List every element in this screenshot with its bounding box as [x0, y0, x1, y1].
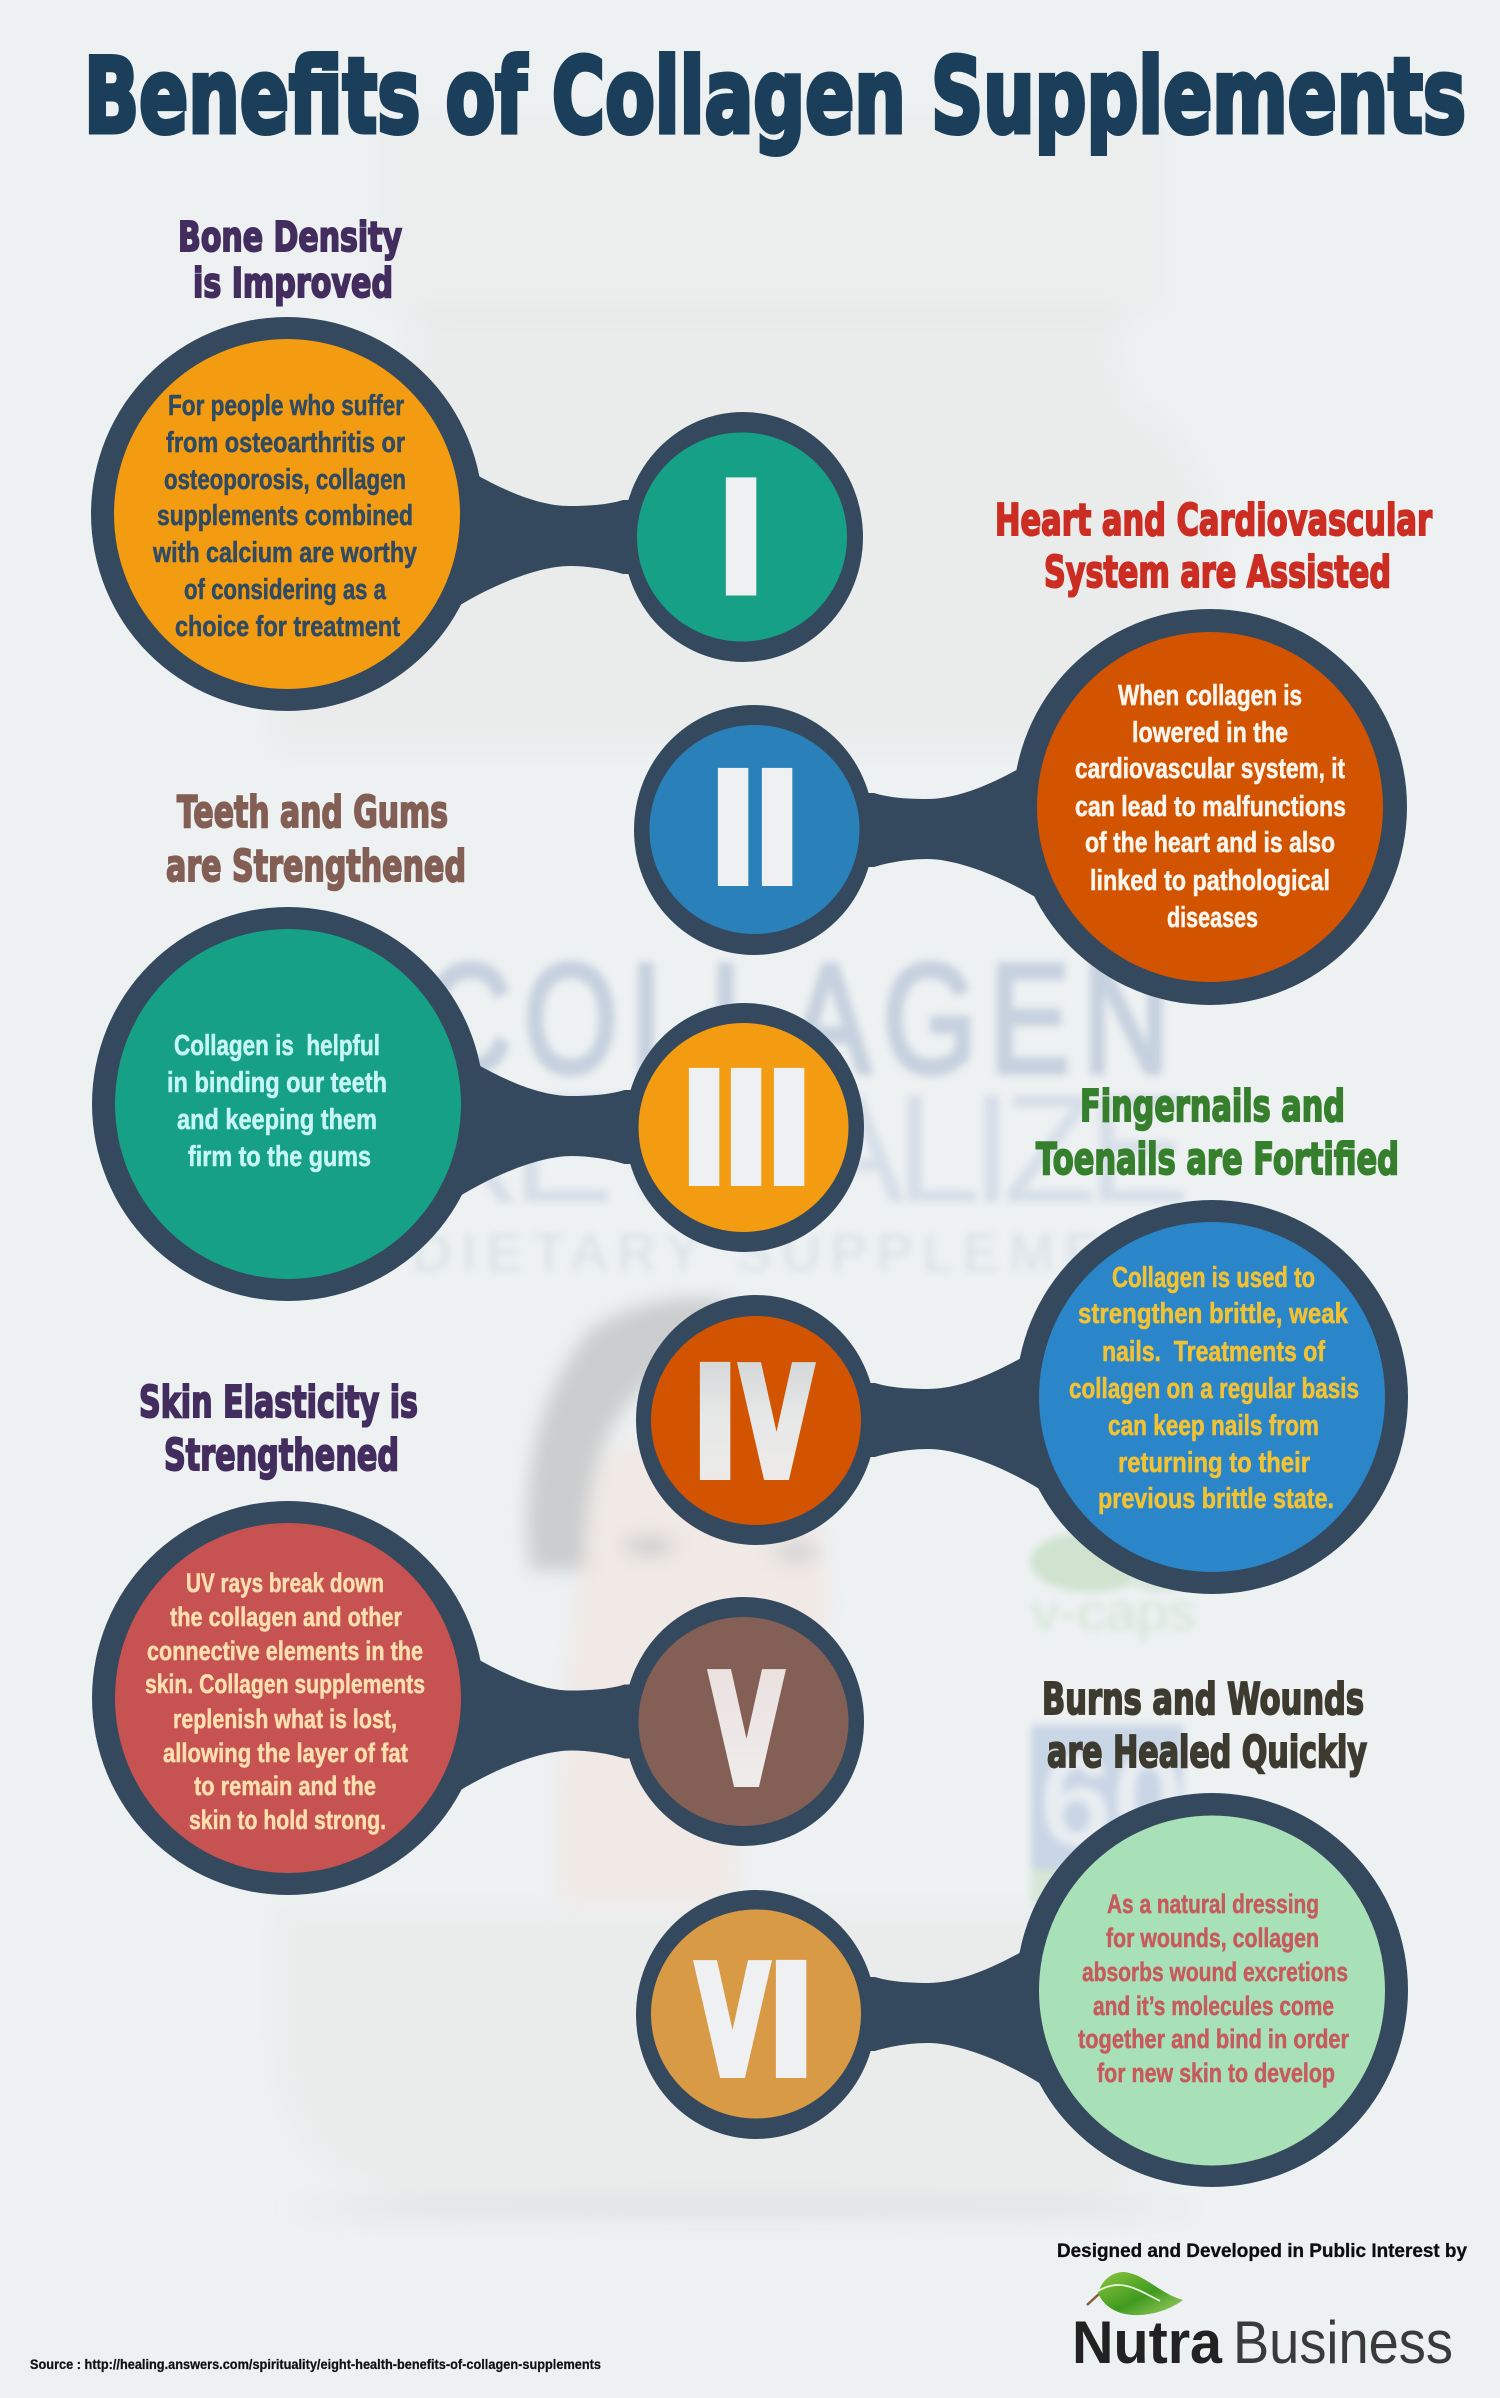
connector: [422, 474, 642, 612]
panel: bone density: [91, 213, 863, 711]
big circle with text: [91, 317, 483, 711]
big circle with text: absorbs wound excretions: [1082, 1957, 1348, 1987]
connector: [855, 767, 1075, 905]
big circle with text: allowing the layer of fat: [163, 1738, 408, 1768]
numeral circle I: [623, 412, 863, 662]
wordmark: [1072, 2309, 1453, 2376]
logo: NutraBusiness: [1072, 2272, 1453, 2376]
big circle with text: [92, 1501, 484, 1895]
numeral circle V: [624, 1597, 864, 1846]
big circle with text: of considering as a: [184, 574, 387, 606]
big circle with text: to remain and the: [194, 1771, 376, 1801]
connector: [856, 1951, 1076, 2089]
numeral circle IV: V: [741, 1338, 812, 1510]
big circle with text: Collagen is used to: [1112, 1262, 1315, 1294]
big circle with text: diseases: [1167, 902, 1258, 934]
big circle with text: and keeping them: [177, 1104, 377, 1136]
heading: is Improved: [193, 259, 393, 307]
blurred supplement jar backdrop: [274, 115, 1217, 2216]
big circle with text: in binding our teeth: [167, 1067, 387, 1099]
big circle with text: connective elements in the: [147, 1636, 423, 1666]
big circle with text: and it’s molecules come: [1093, 1991, 1334, 2021]
heading: Skin Elasticity is: [139, 1377, 418, 1428]
big circle with text: Collagen is helpful: [174, 1030, 380, 1062]
heading: [178, 213, 402, 307]
numeral circle II: [634, 705, 874, 955]
blurred supplement jar backdrop: v-caps: [1031, 1584, 1196, 1642]
heading: [139, 1377, 418, 1481]
numeral circle II: I: [747, 737, 807, 925]
blurred supplement jar backdrop: 60: [1040, 1727, 1185, 1873]
numeral circle VI: I: [761, 1929, 821, 2117]
big circle with text: skin to hold strong.: [189, 1805, 386, 1835]
big circle with text: osteoporosis, collagen: [164, 464, 406, 496]
big circle with text: cardiovascular system, it: [1075, 753, 1345, 785]
connector: [856, 1357, 1076, 1495]
big circle with text: strengthen brittle, weak: [1078, 1298, 1349, 1330]
big circle with text: For people who suffer: [168, 390, 404, 422]
big circle with text: choice for treatment: [175, 611, 400, 643]
numeral circle II: I: [703, 737, 763, 925]
panel: skin elasticity: [92, 1377, 864, 1895]
wordmark: Nutra: [1072, 2309, 1223, 2376]
numeral circle III: [625, 1003, 864, 1252]
big circle with text: together and bind in order: [1078, 2024, 1349, 2054]
wordmark: Business: [1233, 2309, 1453, 2376]
credit line: Designed and Developed in Public Interest by: [1057, 2241, 1467, 2262]
numeral circle III: I: [674, 1037, 734, 1225]
big circle with text: for wounds, collagen: [1106, 1923, 1319, 1953]
heading: Teeth and Gums: [177, 787, 448, 838]
big circle with text: for new skin to develop: [1097, 2058, 1335, 2088]
blurred supplement jar backdrop: DIETARY SUPPLEMENT: [412, 1223, 1192, 1283]
big circle with text: As a natural dressing: [1107, 1889, 1319, 1919]
big circle with text: supplements combined: [157, 500, 413, 532]
big circle with text: [1013, 609, 1407, 1005]
big circle with text: can lead to malfunctions: [1075, 791, 1346, 823]
heading: Bone Density: [178, 213, 402, 261]
icon: leaf: [1087, 2272, 1183, 2315]
numeral circle I: I: [711, 446, 771, 634]
big circle with text: previous brittle state.: [1098, 1483, 1334, 1515]
big circle with text: skin. Collagen supplements: [145, 1669, 425, 1699]
panel: teeth and gums: [92, 787, 864, 1301]
panel: fingernails and toenails: [636, 1081, 1408, 1594]
heading: Strengthened: [164, 1430, 399, 1481]
big circle with text: firm to the gums: [188, 1141, 371, 1173]
big circle with text: the collagen and other: [170, 1602, 402, 1632]
big circle with text: returning to their: [1118, 1447, 1310, 1479]
big circle with text: with calcium are worthy: [152, 537, 417, 569]
numeral circle V: V: [711, 1645, 782, 1817]
numeral circle IV: [636, 1295, 876, 1545]
heading: Fingernails and: [1080, 1081, 1345, 1132]
big circle with text: [92, 907, 484, 1301]
big circle with text: [1016, 1200, 1408, 1594]
big circle with text: UV rays break down: [186, 1568, 384, 1598]
heading: [166, 787, 466, 892]
heading: Burns and Wounds: [1042, 1674, 1364, 1725]
big circle with text: collagen on a regular basis: [1069, 1373, 1359, 1405]
numeral circle VI: V: [697, 1936, 768, 2108]
heading: are Strengthened: [166, 841, 466, 892]
big circle with text: linked to pathological: [1090, 865, 1330, 897]
blurred supplement jar backdrop: REVITALIZE: [410, 1062, 1190, 1235]
heading: [1036, 1081, 1399, 1185]
big circle with text: of the heart and is also: [1085, 827, 1335, 859]
blurred supplement jar backdrop: COLLAGEN: [424, 933, 1182, 1105]
numeral circle VI: [636, 1890, 876, 2139]
numeral circle IV: I: [685, 1331, 745, 1519]
numeral circle III: I: [716, 1037, 776, 1225]
big circle with text: [1016, 1793, 1408, 2187]
big circle with text: nails. Treatments of: [1102, 1336, 1325, 1368]
big circle with text: replenish what is lost,: [173, 1704, 397, 1734]
panel: heart and cardiovascular: [634, 495, 1432, 1005]
big circle with text: can keep nails from: [1108, 1410, 1319, 1442]
panel: burns and wounds: [636, 1674, 1408, 2187]
big circle with text: lowered in the: [1132, 717, 1288, 749]
big circle with text: from osteoarthritis or: [166, 427, 405, 459]
numeral circle III: I: [759, 1037, 819, 1225]
heading: [1042, 1674, 1367, 1778]
big circle with text: When collagen is: [1118, 680, 1302, 712]
connector: [424, 1064, 644, 1202]
source line: Source : http://healing.answers.com/spirituality/eight-health-benefits-of-collagen-supplements: [30, 2356, 601, 2372]
heading: [995, 495, 1432, 598]
connector: [424, 1658, 644, 1796]
